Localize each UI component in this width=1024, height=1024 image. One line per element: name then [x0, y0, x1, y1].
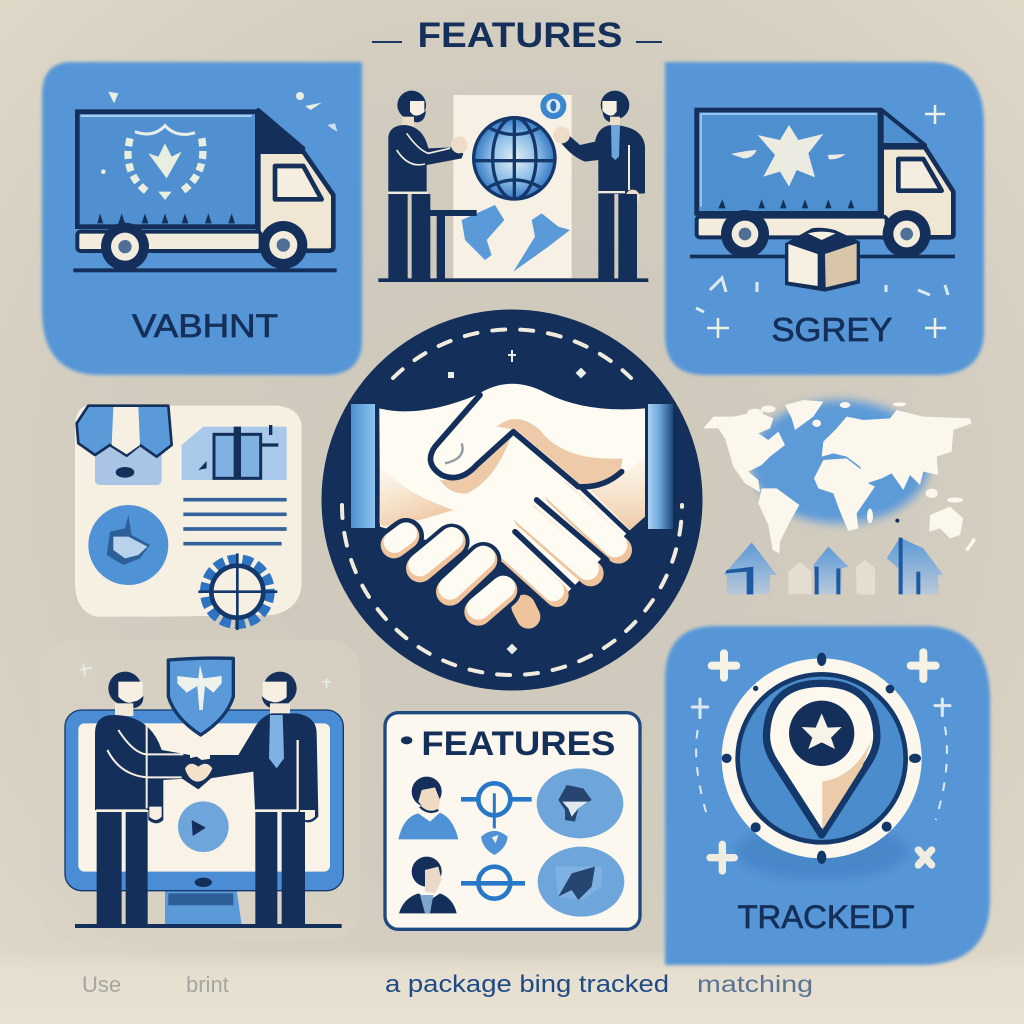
footer caption: brint	[186, 972, 229, 997]
icon: store awning	[77, 406, 172, 485]
poster with globe	[453, 95, 572, 278]
icon: shield	[168, 658, 233, 735]
row 1	[398, 768, 623, 855]
label: Sgrey: SGREY	[772, 311, 892, 348]
footer caption: matching	[697, 971, 813, 997]
text lines	[183, 500, 287, 544]
icon: warehouses	[723, 519, 943, 594]
footer caption: a package bing tracked	[385, 971, 669, 998]
person left	[95, 672, 190, 925]
title: FEATURES	[418, 16, 622, 55]
panel: partners at monitor	[40, 640, 360, 940]
panel: store listing card	[75, 406, 302, 630]
panel: delivery truck with shield	[42, 62, 362, 375]
icon: clasped hands	[379, 384, 645, 617]
person right	[553, 91, 645, 279]
central handshake badge	[322, 310, 702, 690]
world map	[703, 400, 976, 594]
icon: gear target	[198, 553, 277, 630]
icon: truck with emblem	[73, 92, 337, 272]
icon: location pin in ring	[722, 653, 922, 880]
panel: features card	[385, 713, 640, 929]
person right	[210, 672, 318, 925]
monitor	[65, 710, 343, 925]
icon: truck with star	[690, 110, 955, 258]
panel: truck with parcel	[665, 62, 984, 375]
panel: location tracking	[665, 626, 990, 965]
panel: partners with globe	[378, 91, 648, 282]
label: Vabhnt: VABHNT	[132, 308, 278, 344]
icon: gift box	[182, 425, 287, 480]
icon: parcel box	[785, 228, 860, 292]
row 2	[399, 847, 624, 917]
icon: circle badge	[88, 505, 168, 585]
person left	[388, 91, 477, 279]
card heading: FEATURES	[421, 725, 615, 763]
footer caption	[82, 971, 813, 998]
continents	[703, 400, 976, 553]
label: Trackedt: TRACKEDT	[738, 899, 914, 935]
right cuff	[648, 404, 673, 529]
footer caption: Use	[82, 972, 121, 997]
clasped hands	[182, 757, 217, 789]
left cuff	[351, 404, 375, 528]
